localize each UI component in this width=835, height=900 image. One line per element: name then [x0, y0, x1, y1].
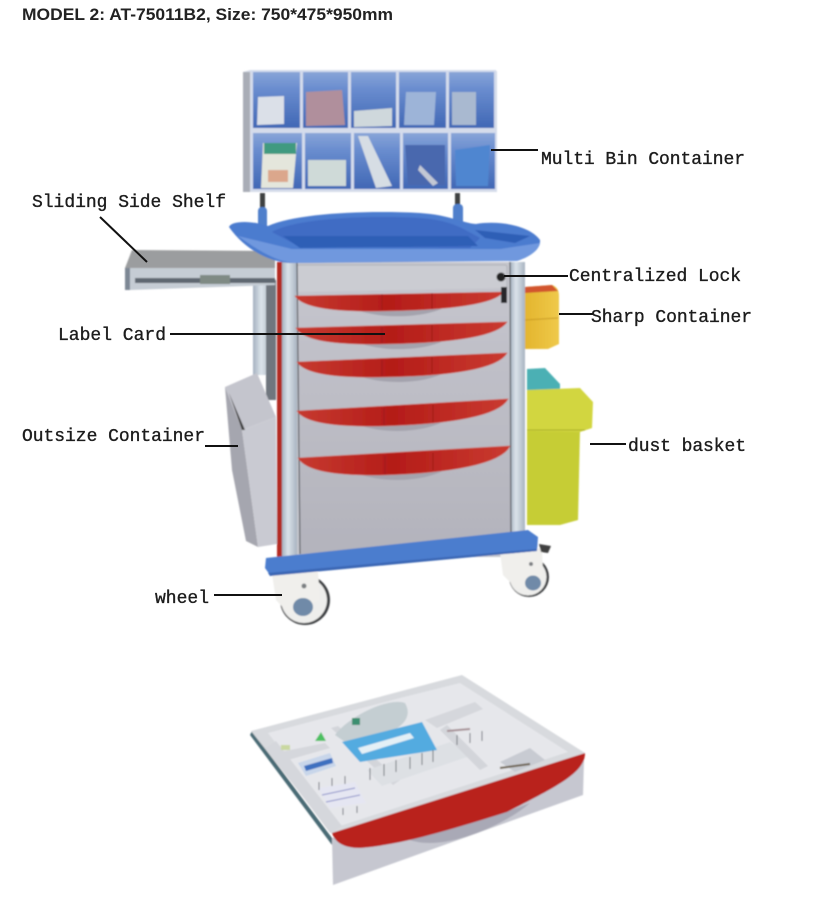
drawer contents — [281, 702, 545, 808]
title: MODEL 2: AT-75011B2, Size: 750*475*950mm — [22, 5, 393, 24]
label: dust basket: dust basket — [628, 437, 746, 457]
label: multi bin container: Multi Bin Container — [541, 150, 745, 170]
handle recess — [405, 803, 530, 843]
blue base — [265, 530, 538, 576]
red drawer handles — [295, 292, 510, 475]
leader line: outsize container — [205, 445, 238, 447]
red drawer handle — [332, 753, 585, 848]
cabinet body — [277, 262, 525, 557]
divider teeth — [319, 731, 482, 815]
sharp container — [525, 285, 559, 349]
leader line: dust basket — [590, 443, 626, 445]
anesthesia trolley photo — [125, 70, 593, 625]
drawer tray — [251, 675, 585, 834]
leader line: centralized lock — [504, 275, 568, 277]
drawer side rail — [250, 731, 332, 845]
label: sliding side shelf: Sliding Side Shelf — [32, 193, 226, 213]
right wheel — [500, 544, 551, 597]
left wheel — [272, 572, 330, 625]
leader line: sharp container — [559, 313, 593, 315]
label: label card: Label Card — [58, 326, 166, 346]
leader line: label card — [170, 333, 385, 335]
multi bin container — [243, 70, 497, 192]
side shelf frame — [253, 280, 276, 400]
blue top tray — [229, 212, 540, 263]
drawer front face — [332, 760, 584, 885]
label: sharp container: Sharp Container — [591, 308, 752, 328]
posts — [258, 193, 463, 229]
dust basket — [527, 368, 593, 525]
label: outsize container: Outsize Container — [22, 427, 205, 447]
label: centralized lock: Centralized Lock — [569, 267, 741, 287]
label: wheel: wheel — [155, 589, 209, 609]
leader line: sliding side shelf — [100, 217, 147, 262]
sliding side shelf — [125, 250, 275, 290]
open drawer photo — [250, 675, 585, 885]
drawer finger recesses — [352, 304, 450, 480]
leader line: multi bin container — [491, 149, 538, 151]
outsize container — [225, 373, 277, 547]
leader line: wheel — [214, 594, 282, 596]
centralized lock — [496, 272, 507, 303]
